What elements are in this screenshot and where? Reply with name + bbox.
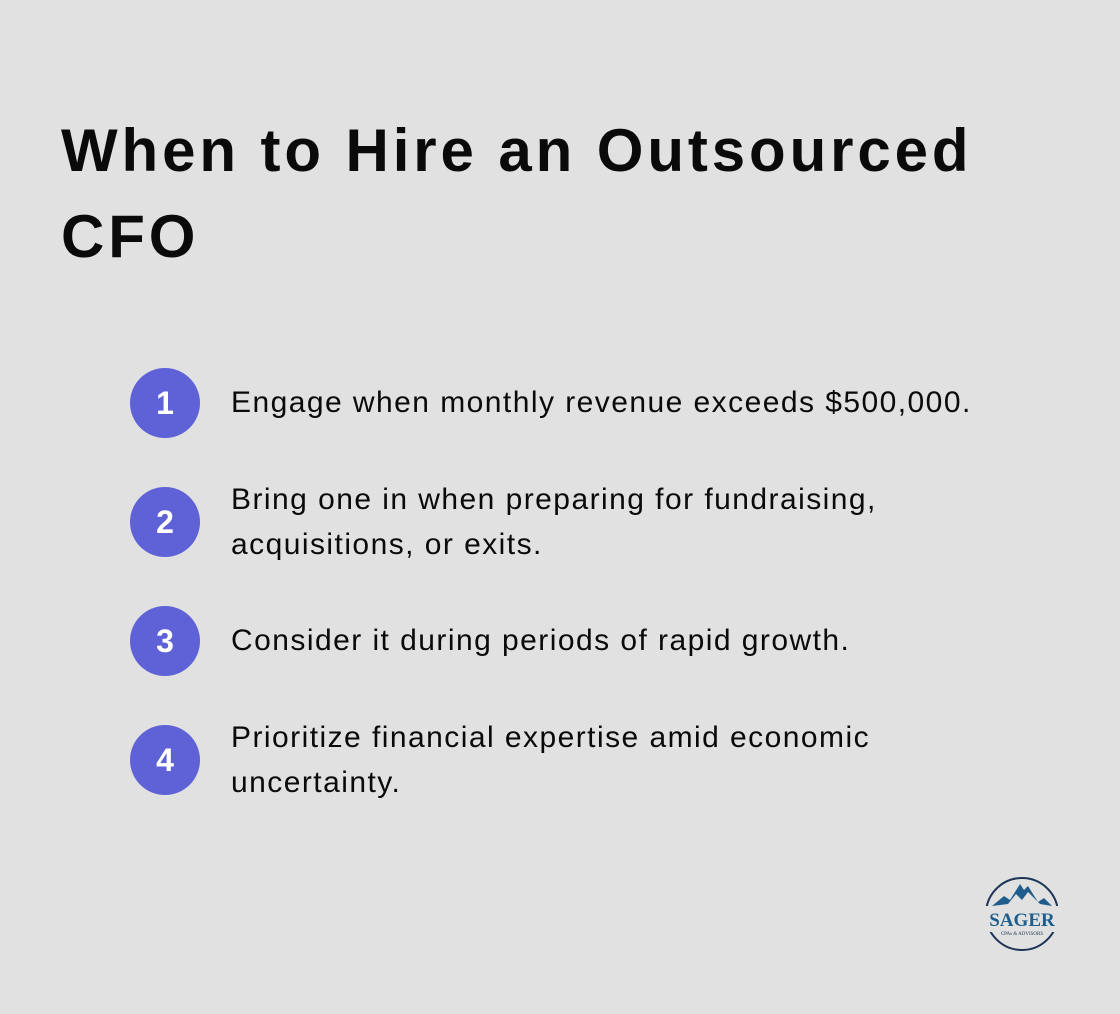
item 3: Consider it during periods of rapid growth.: [231, 624, 850, 657]
item 1: Engage when monthly revenue exceeds $500,000.: [231, 386, 972, 419]
logo: CPAs & ADVISORS: [1001, 932, 1043, 937]
item 3: 3: [156, 623, 174, 659]
item 2: Bring one in when preparing for fundraising,: [231, 483, 877, 516]
item 1: 1: [156, 385, 174, 421]
logo: [986, 877, 1058, 951]
item 2: 2: [156, 504, 174, 540]
item 4: uncertainty.: [231, 766, 401, 799]
item 4: 4: [156, 742, 174, 778]
title: CFO: [61, 203, 199, 270]
item 2: [130, 483, 877, 561]
item 4: [130, 721, 870, 799]
item 2: acquisitions, or exits.: [231, 528, 543, 561]
item 4: Prioritize financial expertise amid economic: [231, 721, 870, 754]
item 3: [130, 606, 850, 676]
item 1: [130, 368, 972, 438]
logo: SAGER: [989, 910, 1055, 931]
title: [61, 117, 972, 270]
title: When to Hire an Outsourced: [61, 117, 972, 184]
